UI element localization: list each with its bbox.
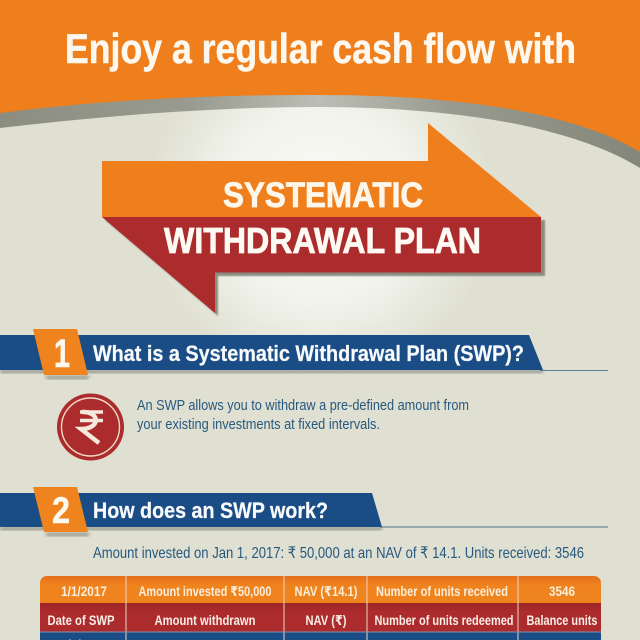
orange header shape bbox=[0, 0, 640, 152]
orange summary row bbox=[40, 576, 601, 603]
SWP table bbox=[40, 576, 601, 640]
SWP table: NAV (₹14.1) bbox=[294, 584, 358, 599]
SWP table: Date of SWP bbox=[48, 613, 114, 628]
number 2: 2 bbox=[52, 490, 70, 531]
red header row bbox=[40, 603, 601, 632]
heading text: How does an SWP work? bbox=[93, 498, 328, 523]
orange arrow bbox=[102, 123, 541, 217]
band shadow bbox=[0, 370, 543, 373]
SWP table: NAV (₹) bbox=[306, 613, 346, 628]
band shadow bbox=[0, 527, 382, 530]
SWP table: Number of units received bbox=[376, 584, 508, 599]
blue data row bbox=[40, 632, 601, 640]
heading rule bbox=[380, 526, 608, 528]
arrow shadow bbox=[105, 220, 545, 316]
orange number tab bbox=[33, 487, 88, 532]
double arrow banner bbox=[102, 123, 545, 316]
section 1 description: your existing investments at fixed intervals. bbox=[137, 416, 380, 433]
blue band bbox=[0, 335, 543, 370]
section 2 heading bbox=[0, 487, 608, 536]
number 1: 1 bbox=[54, 332, 70, 376]
SWP table: Amount invested ₹50,000 bbox=[138, 584, 272, 599]
number tab shadow bbox=[45, 376, 90, 379]
section 1 heading bbox=[0, 329, 608, 379]
section 1 description bbox=[137, 397, 469, 433]
SWP table: Number of units redeemed bbox=[374, 613, 514, 628]
banner title line 1: SYSTEMATIC bbox=[223, 176, 423, 215]
SWP table: Amount withdrawn bbox=[154, 613, 256, 628]
SWP table: 1/1/2017 bbox=[61, 584, 107, 599]
SWP table: Balance units bbox=[526, 613, 598, 628]
section 1 description: An SWP allows you to withdraw a pre-defined amount from bbox=[137, 397, 469, 414]
curved grey swoosh bbox=[0, 80, 640, 168]
rupee icon bbox=[57, 394, 124, 460]
SWP table: 3546 bbox=[549, 584, 575, 599]
blue band bbox=[0, 493, 382, 527]
heading rule bbox=[540, 370, 608, 372]
number tab shadow bbox=[45, 533, 90, 536]
orange number tab bbox=[33, 329, 88, 375]
banner title line 2: WITHDRAWAL PLAN bbox=[164, 220, 481, 261]
background glow bbox=[0, 30, 640, 385]
heading text: What is a Systematic Withdrawal Plan (SWP)? bbox=[93, 341, 524, 366]
header band bbox=[0, 0, 640, 168]
red arrow bbox=[102, 217, 541, 313]
